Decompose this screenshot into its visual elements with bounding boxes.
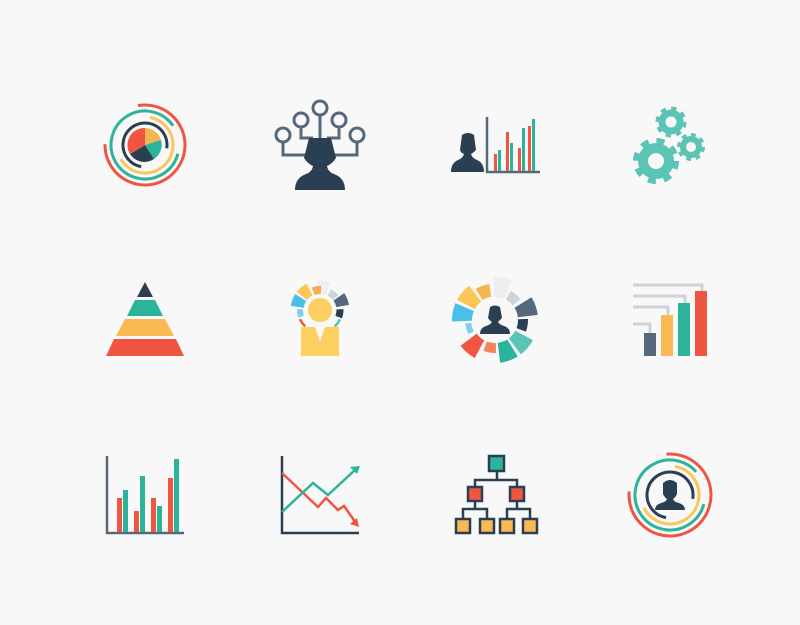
icon: person in rings	[626, 451, 714, 539]
icon: pyramid	[106, 282, 184, 356]
icon: circular pie chart	[99, 99, 191, 191]
icon: step bar chart	[633, 285, 707, 356]
icon: line chart with arrows	[282, 456, 360, 533]
icon: person with sunburst	[288, 278, 352, 356]
icon: woman with bar chart	[451, 117, 540, 172]
icon: grouped bar chart	[107, 456, 184, 533]
icon: org chart	[456, 456, 537, 533]
icon: gears	[639, 110, 702, 178]
icon: person in segmented ring	[450, 275, 540, 365]
icon: person with idea network	[276, 101, 364, 190]
